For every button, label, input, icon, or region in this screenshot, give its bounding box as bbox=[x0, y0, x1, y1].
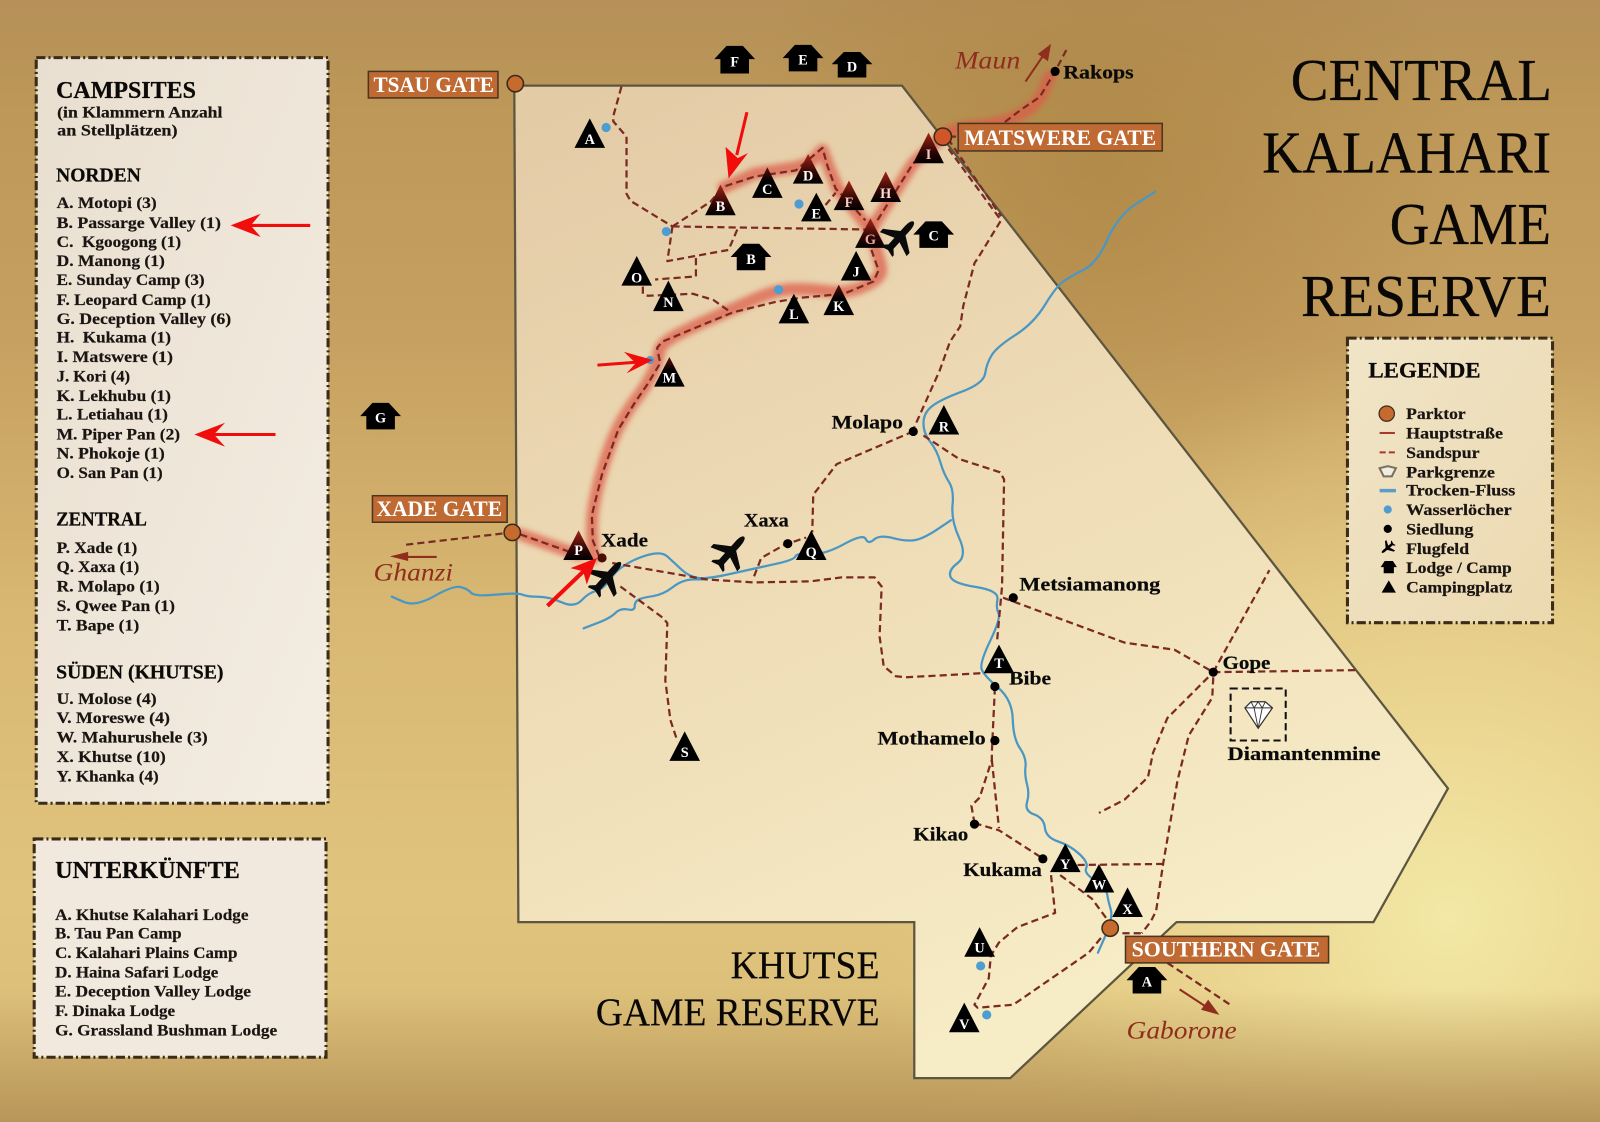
campsite markers: I bbox=[926, 147, 932, 163]
list: Norden bbox=[56, 165, 231, 482]
list: Zentral: ZENTRAL bbox=[56, 508, 147, 530]
list: Zentral: T. Bape (1) bbox=[57, 617, 139, 634]
list: Norden: D. Manong (1) bbox=[57, 253, 165, 270]
campsite markers: F bbox=[845, 195, 854, 211]
red arrow: map M bbox=[597, 352, 653, 373]
campsite markers: W bbox=[1092, 877, 1107, 893]
list: lodges: F. Dinaka Lodge bbox=[55, 1003, 175, 1020]
heading: campsites: CAMPSITES bbox=[56, 77, 196, 104]
lodge markers: C bbox=[929, 229, 939, 245]
list: Süden bbox=[56, 660, 223, 785]
legend labels: Flugfeld bbox=[1406, 541, 1469, 558]
legend labels: Lodge / Camp bbox=[1406, 560, 1512, 577]
panel: accommodation bbox=[34, 839, 326, 1057]
panel: campsites bbox=[36, 58, 328, 803]
legend symbols bbox=[1377, 406, 1398, 593]
list: Süden: SÜDEN (KHUTSE) bbox=[56, 660, 223, 683]
list: Zentral bbox=[56, 508, 175, 634]
list: Norden: F. Leopard Camp (1) bbox=[57, 292, 211, 309]
red arrow: map P bbox=[547, 558, 597, 606]
place names: Bibe bbox=[1009, 668, 1051, 689]
place names: Xaxa bbox=[744, 510, 789, 531]
heading: campsites bbox=[56, 77, 223, 140]
gate: Tsau: TSAU GATE bbox=[373, 72, 494, 97]
list: Norden: H. Kukama (1) bbox=[57, 330, 171, 347]
list: Süden: U. Molose (4) bbox=[57, 691, 157, 708]
list: Norden: E. Sunday Camp (3) bbox=[57, 272, 205, 289]
subtitle: Khutse Game Reserve bbox=[596, 944, 880, 1034]
lodge markers: G bbox=[375, 410, 386, 426]
highlighted route bbox=[520, 76, 1050, 558]
legend labels bbox=[1406, 406, 1515, 597]
list: Norden: N. Phokoje (1) bbox=[57, 445, 165, 462]
gate: Southern bbox=[1102, 920, 1329, 963]
place names: Gope bbox=[1222, 653, 1271, 674]
place names: Metsiamanong bbox=[1019, 575, 1161, 596]
list: lodges: C. Kalahari Plains Camp bbox=[55, 945, 237, 962]
legend labels: Siedlung bbox=[1406, 521, 1473, 538]
heading: campsites: (in Klammern Anzahl bbox=[57, 104, 223, 121]
settlements bbox=[597, 67, 1218, 863]
campsite markers bbox=[563, 118, 1143, 1033]
campsite markers: V bbox=[959, 1017, 970, 1033]
list: Norden: A. Motopi (3) bbox=[57, 195, 157, 212]
campsite markers: G bbox=[865, 232, 876, 248]
lodge markers: D bbox=[847, 59, 857, 75]
rivers bbox=[392, 192, 1155, 953]
list: Süden: Y. Khanka (4) bbox=[57, 768, 159, 785]
red arrow: campsite list M bbox=[194, 423, 276, 447]
list: lodges: A. Khutse Kalahari Lodge bbox=[55, 907, 248, 924]
list: Süden: V. Moreswe (4) bbox=[57, 710, 170, 727]
title: KALAHARI bbox=[1262, 119, 1551, 185]
campsite markers: Q bbox=[806, 545, 817, 561]
list: Norden: L. Letiahau (1) bbox=[57, 407, 168, 424]
title: CENTRAL bbox=[1291, 47, 1552, 113]
list: Zentral: S. Qwee Pan (1) bbox=[57, 598, 175, 615]
lodge markers: B bbox=[746, 252, 756, 268]
campsite markers: X bbox=[1122, 902, 1133, 918]
list: Norden: C. Kgoogong (1) bbox=[57, 234, 181, 251]
campsite markers: P bbox=[574, 543, 583, 559]
red arrow: campsite list B bbox=[231, 214, 310, 237]
legend labels: Parkgrenze bbox=[1406, 464, 1495, 481]
direction: Gaborone: Gaborone bbox=[1127, 1015, 1237, 1044]
place names: Diamantenmine bbox=[1228, 744, 1381, 765]
legend labels: Parktor bbox=[1406, 406, 1466, 423]
heading: campsites: an Stellplätzen) bbox=[57, 123, 178, 140]
list: lodges: E. Deception Valley Lodge bbox=[55, 984, 251, 1001]
diamond mine icon bbox=[1231, 688, 1286, 741]
place names bbox=[601, 63, 1381, 881]
park boundary bbox=[514, 86, 1448, 1078]
legend labels: Trocken-Fluss bbox=[1406, 483, 1515, 500]
roads bbox=[406, 50, 1356, 1008]
panel: legend bbox=[1347, 338, 1553, 623]
place names: Rakops bbox=[1063, 63, 1134, 84]
list: Norden: B. Passarge Valley (1) bbox=[57, 215, 221, 232]
legend labels: Hauptstraße bbox=[1406, 426, 1503, 443]
lodge markers: A bbox=[1142, 974, 1153, 990]
list: Zentral: P. Xade (1) bbox=[57, 540, 137, 557]
list: Norden: I. Matswere (1) bbox=[57, 349, 173, 366]
campsite markers: U bbox=[974, 941, 985, 957]
campsite markers: T bbox=[994, 656, 1004, 672]
campsite markers: O bbox=[631, 271, 642, 287]
list: Norden: J. Kori (4) bbox=[57, 368, 130, 385]
place names: Kukama bbox=[963, 860, 1042, 881]
campsite markers: R bbox=[939, 419, 950, 435]
subtitle: Khutse Game Reserve: GAME RESERVE bbox=[596, 991, 880, 1034]
list: Zentral: Q. Xaxa (1) bbox=[57, 559, 139, 576]
campsite markers: K bbox=[833, 299, 844, 315]
airfields bbox=[580, 210, 927, 604]
lodge markers: F bbox=[730, 54, 739, 70]
red arrow: map B bbox=[726, 112, 748, 178]
list: Norden: G. Deception Valley (6) bbox=[57, 311, 231, 328]
list: lodges: G. Grassland Bushman Lodge bbox=[55, 1022, 277, 1039]
campsite markers: S bbox=[681, 745, 689, 761]
list: Süden: W. Mahurushele (3) bbox=[57, 730, 208, 747]
heading: Unterkünfte: UNTERKÜNFTE bbox=[55, 857, 240, 884]
campsite markers: H bbox=[880, 186, 891, 202]
list: lodges bbox=[55, 907, 277, 1039]
direction: Maun bbox=[954, 44, 1051, 82]
list: Süden: X. Khutse (10) bbox=[57, 749, 166, 766]
place names: Kikao bbox=[913, 824, 968, 845]
direction: Maun: Maun bbox=[954, 45, 1020, 74]
direction: Gaborone bbox=[1127, 989, 1237, 1044]
lodge markers bbox=[360, 45, 1167, 993]
place names: Molapo bbox=[832, 412, 903, 433]
campsite markers: A bbox=[585, 132, 596, 148]
place names: Xade bbox=[601, 531, 648, 552]
list: Norden: K. Lekhubu (1) bbox=[57, 388, 171, 405]
campsite markers: D bbox=[803, 169, 813, 185]
list: Norden: M. Piper Pan (2) bbox=[57, 427, 180, 444]
campsite markers: C bbox=[762, 182, 773, 198]
direction: Ghanzi: Ghanzi bbox=[373, 557, 453, 586]
campsite markers: J bbox=[853, 264, 860, 280]
gate: Xade bbox=[372, 496, 520, 541]
campsite markers: M bbox=[663, 371, 677, 386]
list: Norden: NORDEN bbox=[56, 165, 141, 187]
list: Zentral: R. Molapo (1) bbox=[57, 579, 160, 596]
heading: Legende: LEGENDE bbox=[1368, 357, 1481, 382]
gate: Southern: SOUTHERN GATE bbox=[1132, 937, 1320, 962]
campsite markers: Y bbox=[1060, 857, 1071, 873]
gate: Matswere: MATSWERE GATE bbox=[964, 125, 1156, 150]
campsite markers: L bbox=[789, 307, 799, 323]
campsite markers: N bbox=[663, 295, 674, 311]
list: Norden: O. San Pan (1) bbox=[57, 465, 163, 482]
title: RESERVE bbox=[1301, 263, 1551, 329]
campsite markers: E bbox=[812, 206, 821, 222]
campsite markers: B bbox=[716, 199, 726, 215]
lodge markers: E bbox=[798, 52, 808, 68]
legend labels: Campingplatz bbox=[1406, 580, 1512, 597]
list: lodges: D. Haina Safari Lodge bbox=[55, 965, 218, 982]
place names: Mothamelo bbox=[878, 729, 986, 750]
gate: Xade: XADE GATE bbox=[377, 496, 502, 521]
legend labels: Sandspur bbox=[1406, 445, 1480, 462]
legend labels: Wasserlöcher bbox=[1406, 502, 1512, 519]
title: GAME bbox=[1390, 191, 1551, 257]
title bbox=[1262, 47, 1552, 329]
subtitle: Khutse Game Reserve: KHUTSE bbox=[731, 944, 880, 987]
water holes bbox=[602, 123, 991, 1019]
list: lodges: B. Tau Pan Camp bbox=[55, 925, 182, 942]
